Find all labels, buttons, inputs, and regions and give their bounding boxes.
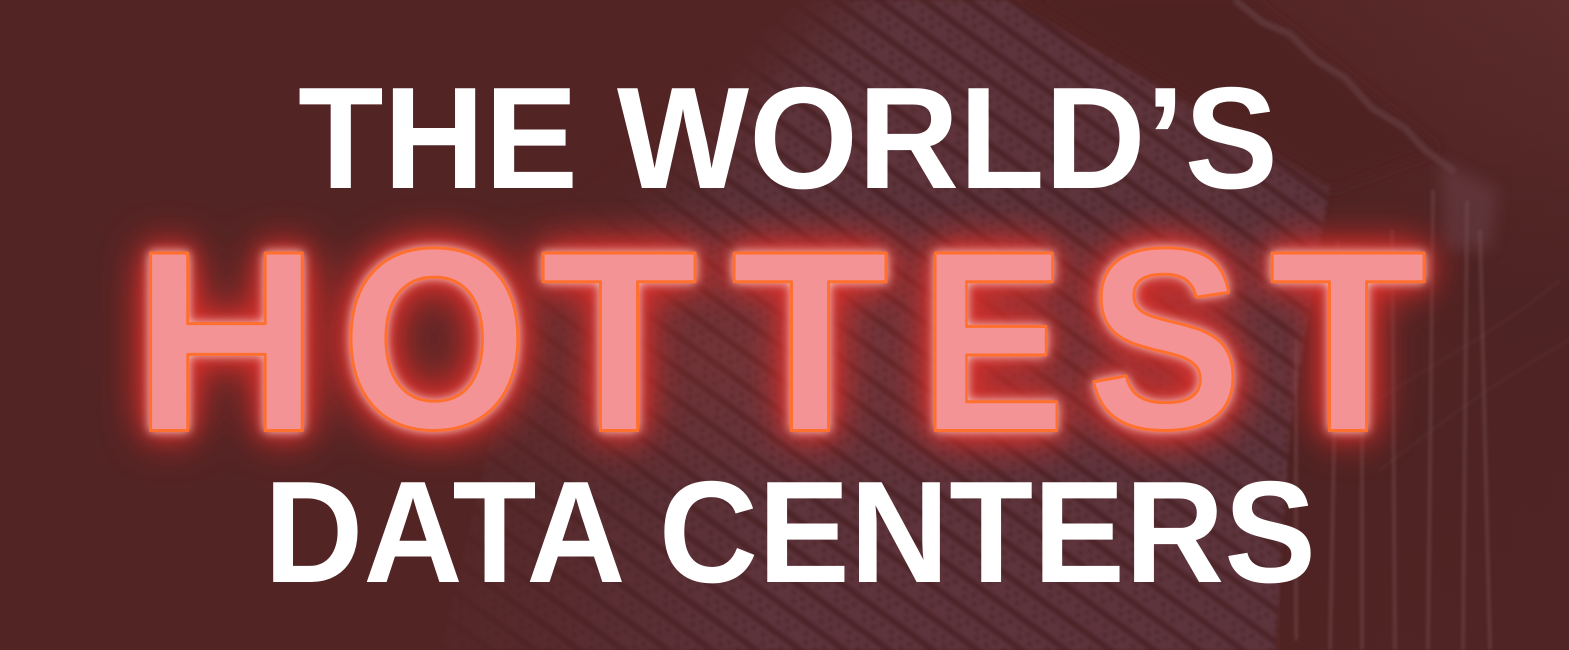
background: heat glow behind the word <box>70 195 1510 495</box>
title: HOTTEST neon word <box>133 194 1427 486</box>
background: server rack photo <box>522 0 1497 650</box>
title: HOTTEST neon word: T <box>540 196 698 486</box>
title: HOTTEST neon word: H <box>133 196 320 486</box>
title: HOTTEST neon word: S <box>1087 196 1242 484</box>
title: THE WORLD'S: THE WORLD’S <box>298 57 1278 219</box>
title: HOTTEST neon word: E <box>921 198 1065 486</box>
title: HOTTEST neon word: T <box>731 196 889 486</box>
title: HOTTEST neon word: O <box>341 194 528 483</box>
title: HOTTEST neon word: T <box>1269 196 1427 486</box>
title: DATA CENTERS: DATA CENTERS <box>264 451 1316 613</box>
